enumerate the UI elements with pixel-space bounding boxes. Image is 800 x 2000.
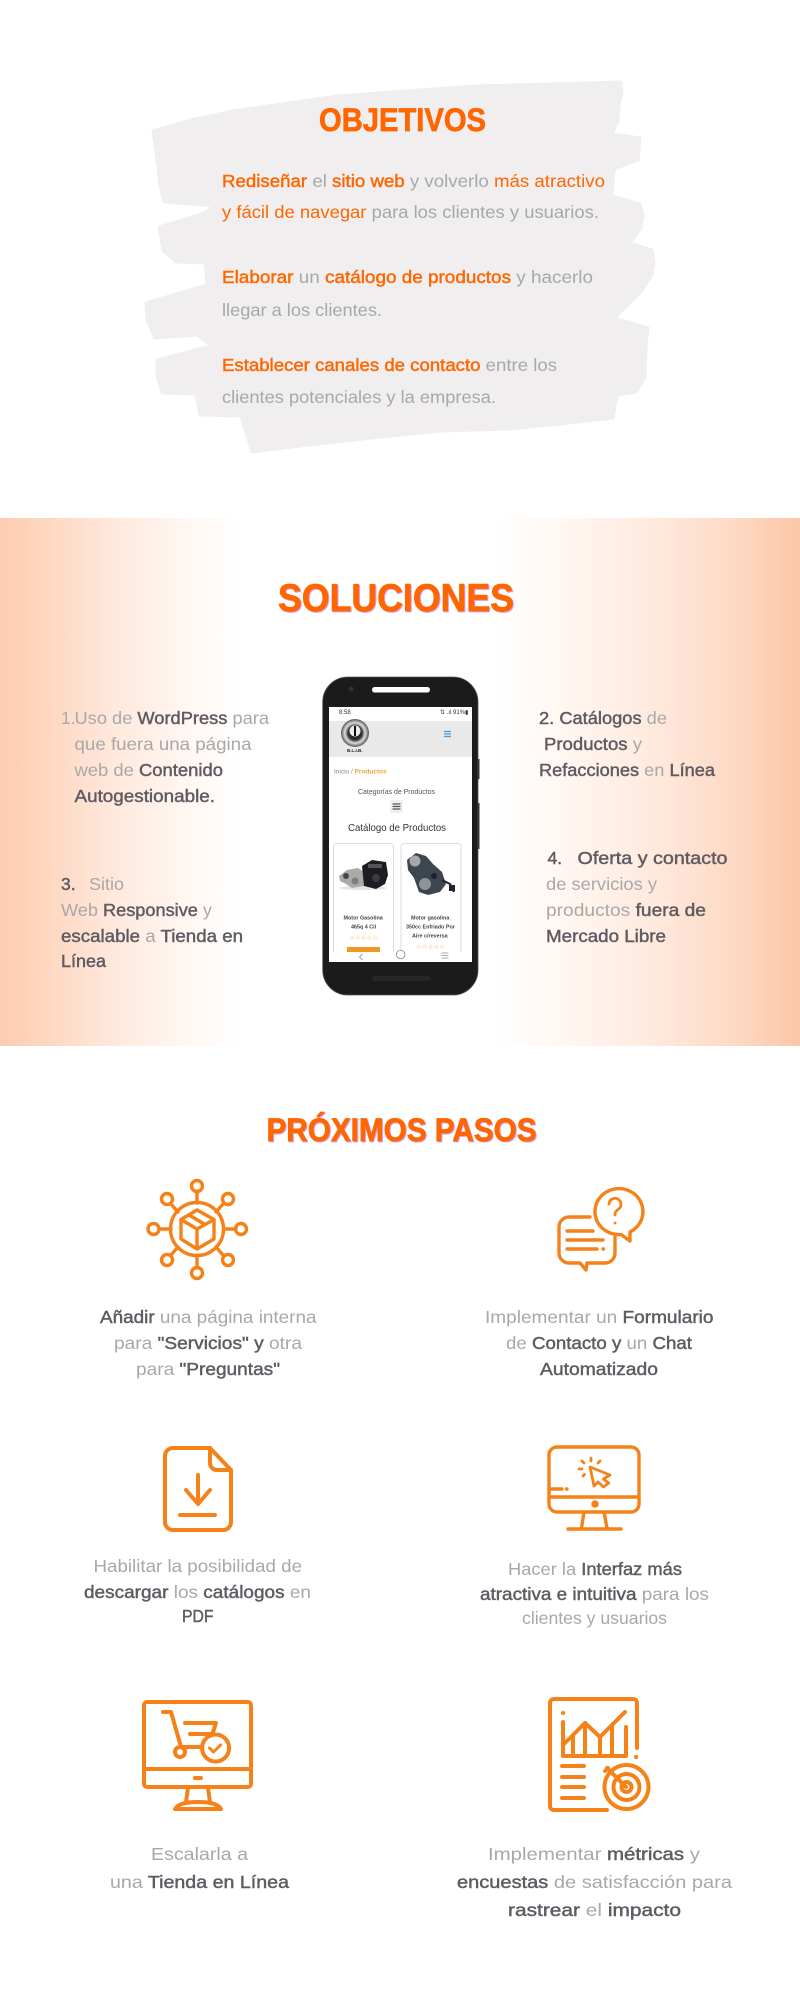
text: solucion 3: Sitio	[89, 874, 124, 894]
screen: 8:58	[339, 710, 351, 716]
breadcrumb: Inicio / Productos	[334, 768, 387, 776]
text: paso 4: clientes y usuarios	[522, 1608, 667, 1628]
text: solucion 4: 4.	[548, 848, 562, 868]
icon: network box	[148, 1180, 246, 1278]
text: solucion 3	[61, 874, 243, 971]
text: paso 5: una Tienda en Línea	[110, 1872, 289, 1892]
text: solucion 2	[539, 708, 715, 780]
product card 2: Aire c/reversa	[412, 934, 449, 940]
heading: objetivos: OBJETIVOS	[319, 102, 486, 138]
text: paso 6	[457, 1844, 732, 1920]
text: solucion 3: 3.	[61, 874, 76, 894]
text: paso 2	[485, 1307, 714, 1379]
product card 2: Motor gasolina	[411, 916, 450, 922]
panel: soluciones	[0, 518, 800, 1046]
text: objetivo 2	[222, 267, 593, 320]
text: solucion 4: productos fuera de	[546, 900, 706, 920]
text: paso 3: Habilitar la posibilidad de	[94, 1556, 302, 1576]
text: solucion 4	[546, 848, 728, 946]
text: objetivo 1: Rediseñar el sitio web y volverlo más atractivo	[222, 171, 605, 191]
icon: monitor shopping cart	[144, 1702, 251, 1809]
text: paso 2: Automatizado	[540, 1359, 658, 1379]
text: solucion 1: que fuera una página	[74, 734, 252, 754]
text: paso 6: rastrear el impacto	[508, 1900, 681, 1920]
text: paso 2: Implementar un Formulario	[485, 1307, 714, 1327]
text: solucion 2: 2. Catálogos de	[539, 708, 667, 728]
text: paso 5: Escalarla a	[151, 1844, 248, 1864]
text: paso 1: para "Servicios" y otra	[114, 1333, 302, 1353]
product card 1: ☆☆☆☆☆	[349, 934, 378, 942]
text: paso 3	[84, 1556, 311, 1626]
text: objetivo 1	[222, 171, 605, 222]
android nav bar	[329, 950, 472, 962]
text: solucion 4: de servicios y	[546, 874, 657, 894]
text: paso 6: encuestas de satisfacción para	[457, 1872, 732, 1892]
text: objetivo 3: Establecer canales de contacto entre los	[222, 355, 557, 375]
screen: Catálogo de Productos	[348, 822, 446, 834]
gradient background	[0, 518, 800, 1046]
hamburger	[444, 732, 451, 736]
text: objetivo 1: y fácil de navegar para los clientes y usuarios.	[222, 202, 599, 222]
heading: proximos pasos: PRÓXIMOS PASOS	[266, 1112, 536, 1148]
screen: ⇅ .ıl 91%▮	[440, 710, 468, 716]
brush stroke background	[146, 82, 654, 452]
text: paso 1	[100, 1307, 317, 1379]
text: paso 3: descargar los catálogos en	[84, 1582, 311, 1602]
icon: report with target	[550, 1699, 648, 1810]
text: paso 4: atractiva e intuitiva para los	[480, 1584, 709, 1604]
text: paso 5	[110, 1844, 289, 1892]
text: solucion 4: Oferta y contacto	[578, 848, 728, 868]
product card 2: 350cc Enfriado Por	[406, 924, 456, 930]
text: objetivo 3	[222, 355, 557, 407]
text: solucion 1	[61, 708, 269, 806]
text: paso 2: de Contacto y un Chat	[506, 1333, 692, 1353]
screen: Categorías de Productos	[358, 787, 435, 796]
product card 1	[334, 844, 394, 956]
text: solucion 1: Autogestionable.	[74, 786, 215, 806]
icon: monitor cursor	[549, 1447, 639, 1529]
product card 2	[401, 844, 461, 956]
icon: document download	[165, 1448, 231, 1530]
text: solucion 1: Uso de WordPress para	[74, 708, 269, 728]
text: objetivo 3: clientes potenciales y la empresa.	[222, 387, 496, 407]
phone mockup	[323, 677, 480, 995]
text: solucion 1: 1.	[61, 708, 76, 728]
screen	[329, 707, 472, 962]
text: solucion 4: Mercado Libre	[546, 926, 666, 946]
text: paso 3: PDF	[182, 1606, 214, 1626]
text: solucion 2: Productos y	[544, 734, 642, 754]
logo	[341, 719, 369, 753]
text: objetivo 2: llegar a los clientes.	[222, 300, 382, 320]
text: objetivo 2: Elaborar un catálogo de productos y hacerlo	[222, 267, 593, 287]
speaker	[372, 687, 430, 692]
panel: objetivos	[146, 82, 654, 452]
text: solucion 2: Refacciones en Línea	[539, 760, 715, 780]
phone body	[323, 677, 478, 995]
text: paso 4: Hacer la Interfaz más	[508, 1559, 682, 1579]
text: solucion 3: escalable a Tienda en	[61, 926, 243, 946]
product card 2: ☆☆☆☆☆	[416, 943, 445, 951]
text: solucion 1: web de Contenido	[73, 760, 223, 780]
text: paso 1: Añadir una página interna	[100, 1307, 317, 1327]
text: paso 4	[480, 1559, 709, 1628]
product card 1: Motor Gasolina	[344, 916, 384, 922]
icon: chat question	[559, 1189, 643, 1270]
text: solucion 3: Web Responsive y	[61, 900, 212, 920]
text: paso 1: para "Preguntas"	[136, 1359, 280, 1379]
logo: B.L.I.B.	[347, 748, 362, 753]
heading: soluciones: SOLUCIONES	[278, 577, 514, 620]
panel: proximos pasos	[84, 1112, 732, 1920]
text: paso 6: Implementar métricas y	[488, 1844, 700, 1864]
product card 1: 465q 4 Cil	[351, 924, 377, 930]
text: solucion 3: Línea	[61, 951, 106, 971]
